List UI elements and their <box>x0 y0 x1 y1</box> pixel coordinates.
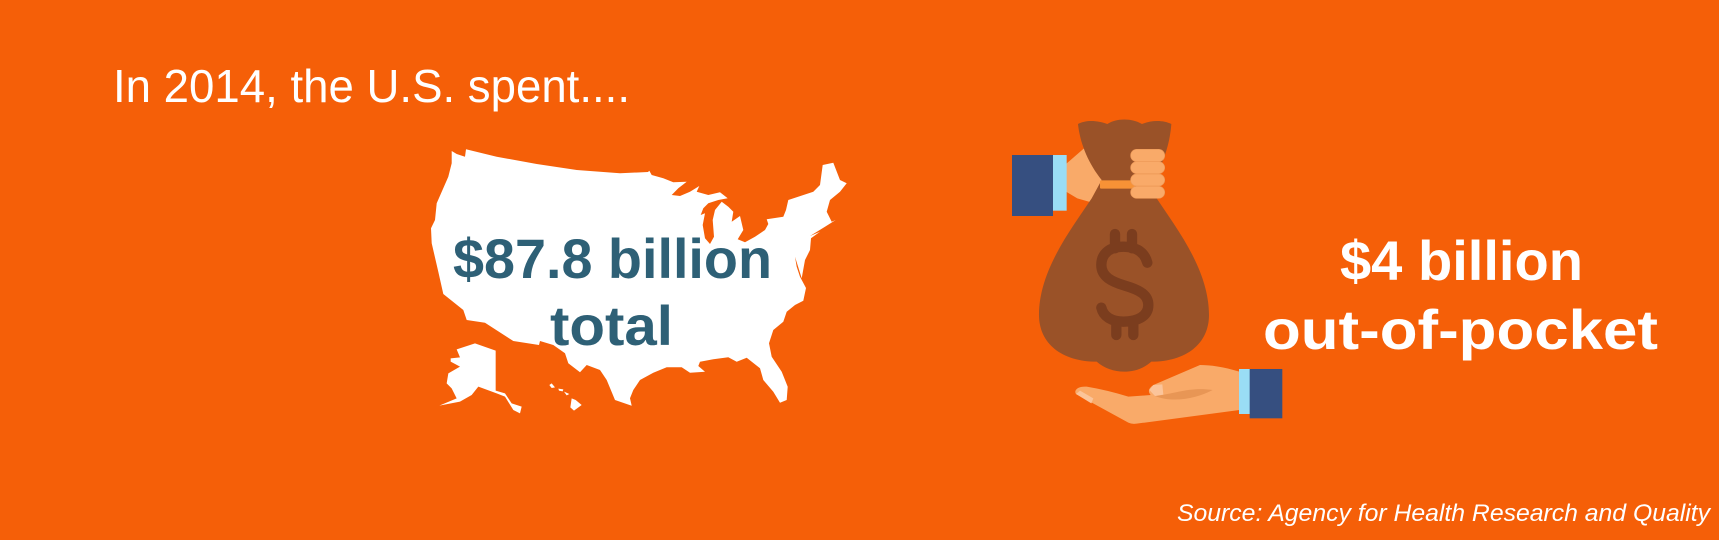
dollar sign <box>1101 234 1148 335</box>
label: $87.8 billion total <box>453 227 772 357</box>
label: $4 billion out-of-pocket: out-of-pocket <box>1263 298 1658 361</box>
money bag <box>1039 119 1209 372</box>
label: $87.8 billion total: $87.8 billion <box>453 227 772 290</box>
panel: U.S. total <box>431 149 847 413</box>
title: In 2014, the U.S. spent.... <box>113 60 630 112</box>
map of the United States <box>431 149 847 413</box>
label: $4 billion out-of-pocket: $4 billion <box>1340 229 1583 292</box>
upper hand <box>1012 148 1103 216</box>
source note: Source: Agency for Health Research and Quality <box>1177 500 1712 527</box>
icon: hands passing money bag <box>1012 119 1282 424</box>
label: $87.8 billion total: total <box>550 294 673 357</box>
lower hand <box>1075 365 1282 424</box>
label: $4 billion out-of-pocket <box>1263 229 1658 361</box>
panel: out-of-pocket <box>1012 119 1658 424</box>
fingers <box>1131 149 1165 198</box>
